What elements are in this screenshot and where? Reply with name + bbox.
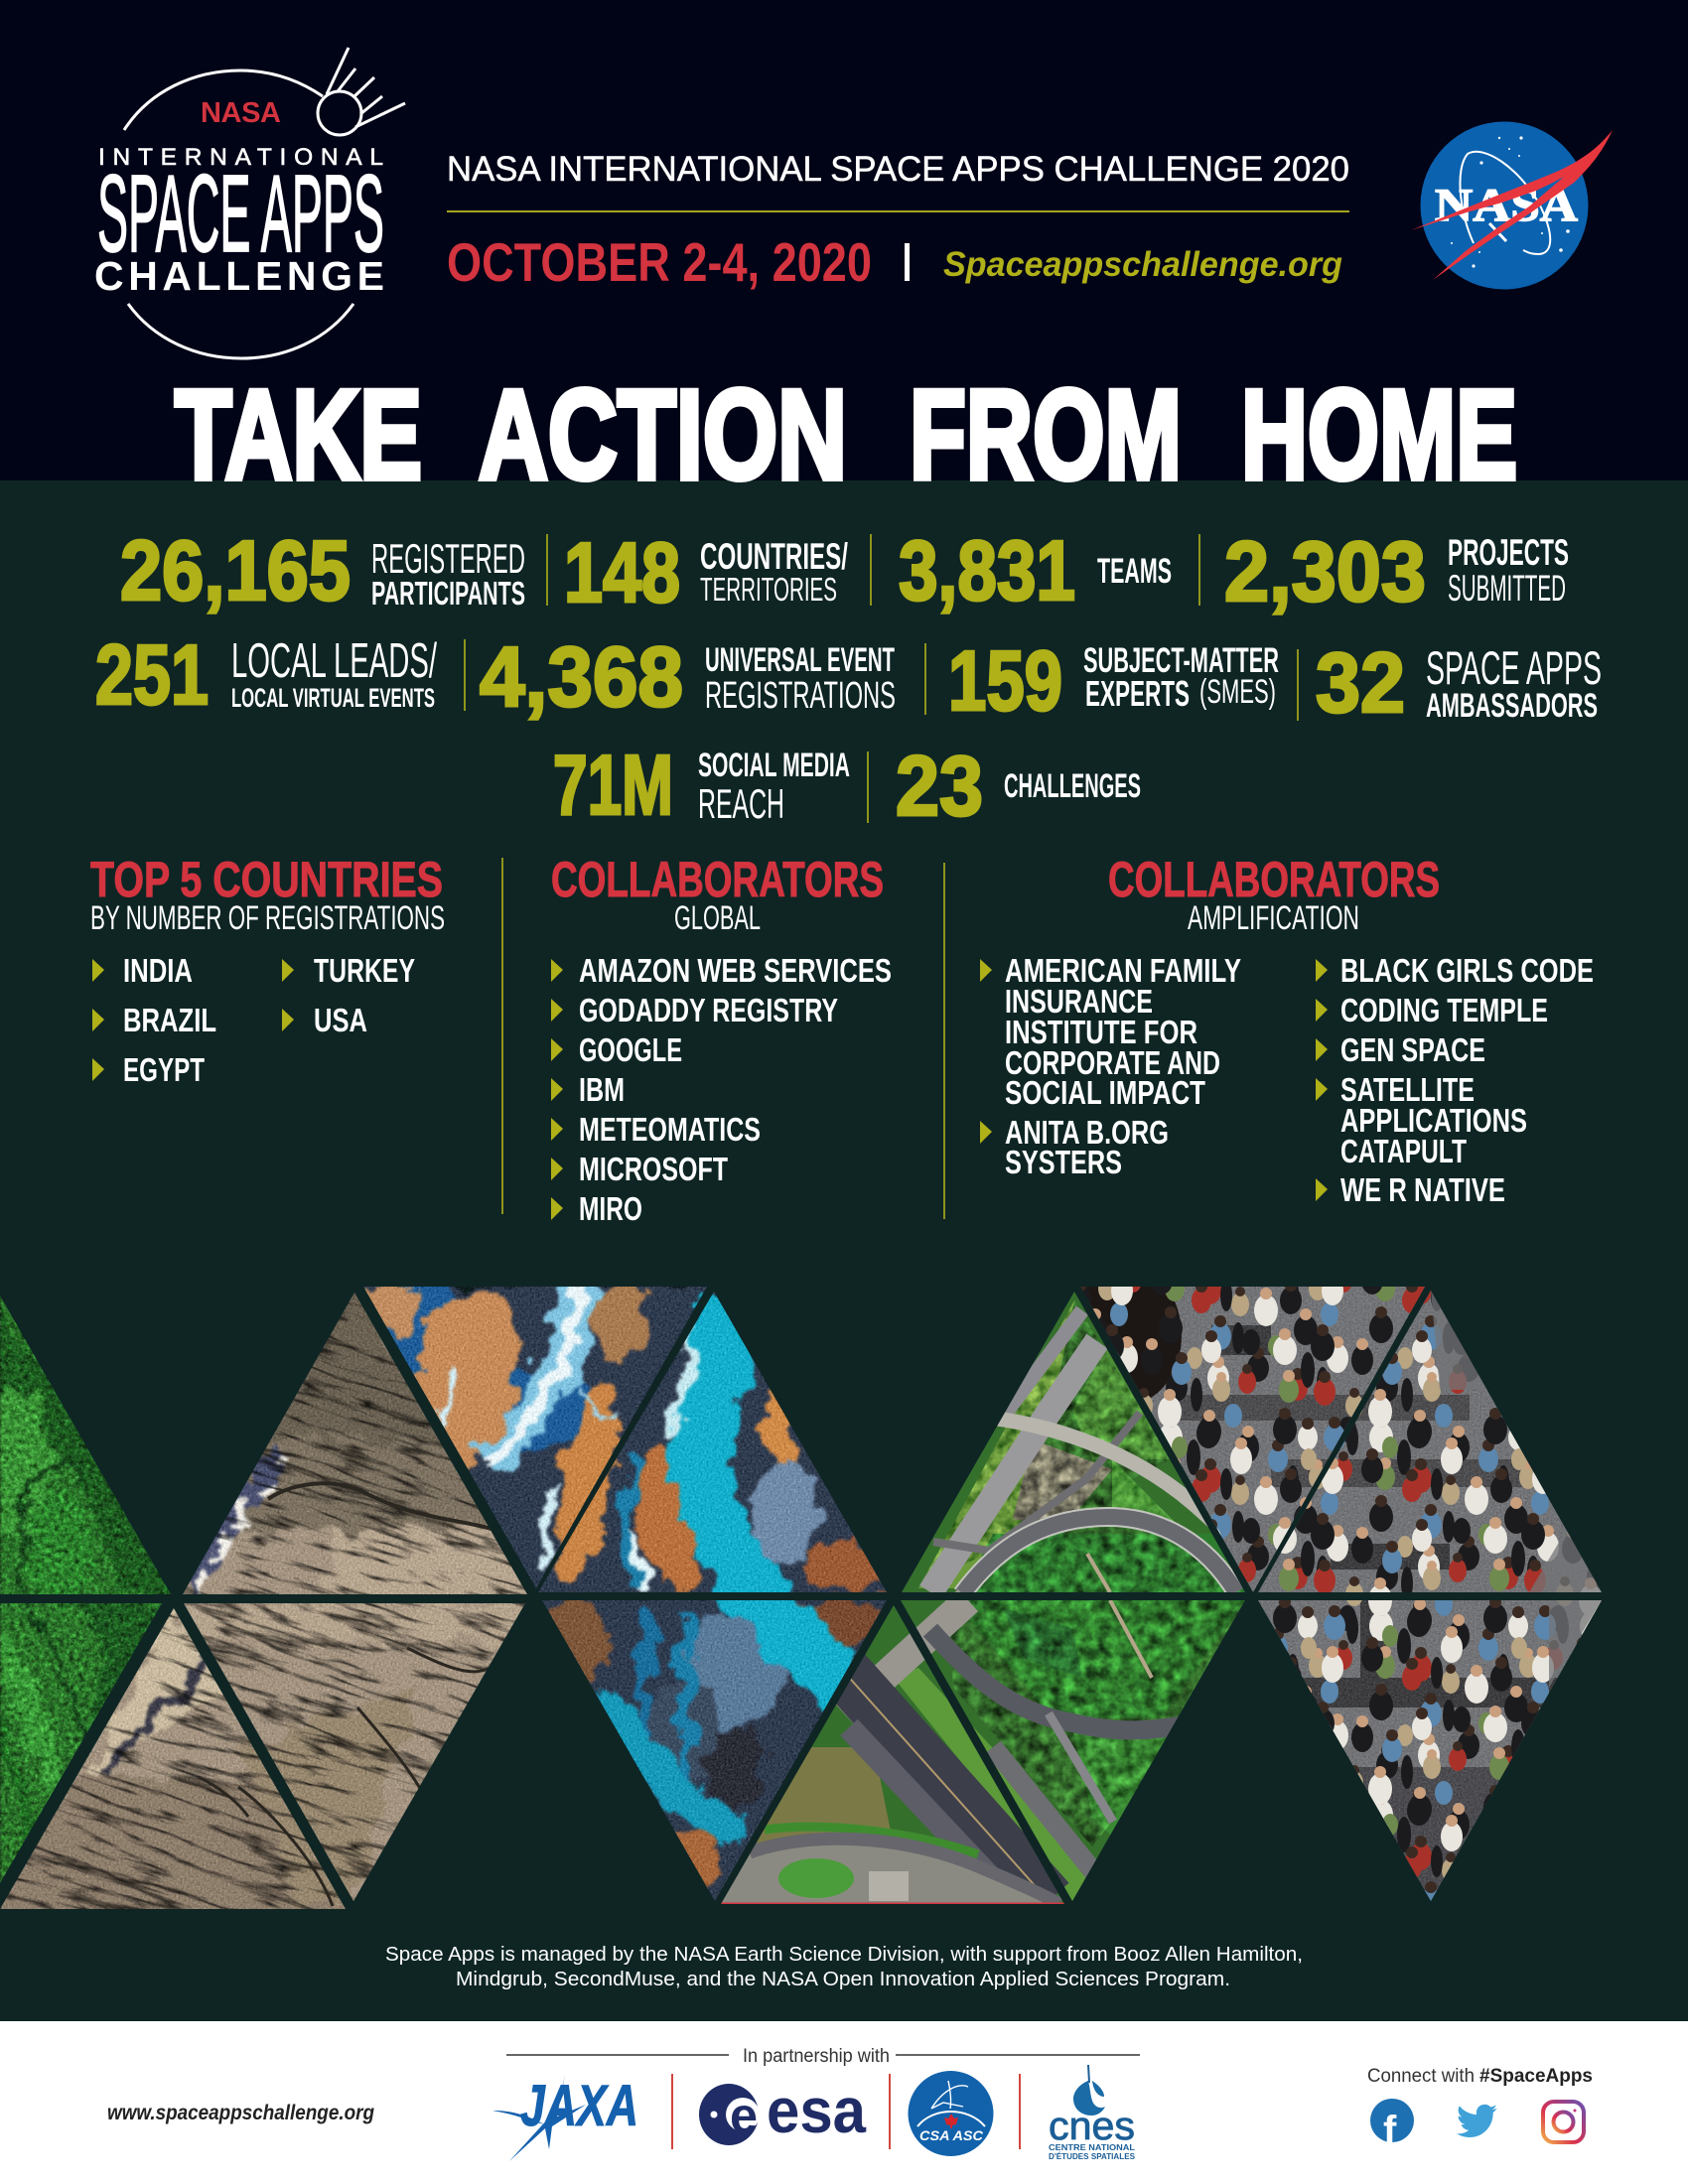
- main headline: TAKE: [175, 364, 422, 506]
- panel: top 5 countries: [90, 852, 445, 1088]
- stat: challenges: [896, 740, 1141, 834]
- logo: ESA: e: [730, 2088, 758, 2143]
- main headline: [175, 364, 1517, 506]
- panel: top 5 countries: EGYPT: [123, 1051, 205, 1088]
- panel: amplification collaborators: CODING TEMPLE: [1340, 992, 1548, 1028]
- panel: global collaborators: COLLABORATORS: [551, 852, 884, 907]
- panel: amplification collaborators: SOCIAL IMPACT: [1005, 1074, 1205, 1111]
- website link: Spaceappschallenge.org: [943, 245, 1342, 284]
- logo: CNES: D'ÉTUDES SPATIALES: [1049, 2151, 1135, 2161]
- stat: countries: TERRITORIES: [700, 571, 837, 608]
- panel: amplification collaborators: CORPORATE AND: [1005, 1044, 1220, 1081]
- stat: social media reach: SOCIAL MEDIA: [698, 747, 850, 784]
- panel: amplification collaborators: AMERICAN FAMILY: [1005, 952, 1241, 989]
- credit text: Mindgrub, SecondMuse, and the NASA Open Innovation Applied Sciences Program.: [456, 1968, 1230, 1990]
- panel: amplification collaborators: BLACK GIRLS CODE: [1340, 952, 1594, 989]
- stat: subject-matter experts: 159: [948, 634, 1062, 729]
- logo: Space Apps Challenge: NASA: [201, 97, 281, 129]
- panel: amplification collaborators: AMPLIFICATION: [1188, 899, 1359, 937]
- logo: CSA ASC: CSA ASC: [919, 2127, 984, 2143]
- panel: amplification collaborators: INSURANCE: [1005, 983, 1153, 1020]
- stat: subject-matter experts: SUBJECT-MATTER: [1083, 641, 1279, 680]
- stat: local leads: 251: [95, 628, 209, 723]
- image mosaic: rocky terrain: [0, 1293, 527, 1909]
- logo: NASA meatball: NASA: [1435, 180, 1578, 231]
- panel: amplification collaborators: COLLABORATORS: [1108, 852, 1440, 907]
- image mosaic: crowd from above: [1080, 1287, 1602, 1901]
- connect with hashtag: #SpaceApps: [1479, 2066, 1593, 2087]
- stat: social media reach: 71M: [553, 739, 673, 833]
- logo: CNES: cnes: [1049, 2105, 1135, 2148]
- panel: top 5 countries: BY NUMBER OF REGISTRATIONS: [90, 899, 445, 937]
- panel: amplification collaborators: SYSTERS: [1005, 1144, 1122, 1180]
- footer website: www.spaceappschallenge.org: [107, 2102, 374, 2124]
- stat: projects: 2,303: [1224, 525, 1426, 619]
- logo: JAXA: JAXA: [520, 2074, 638, 2138]
- stat: subject-matter experts: [948, 634, 1279, 729]
- icon: Twitter: [1457, 2105, 1497, 2137]
- stat: projects: PROJECTS: [1448, 532, 1569, 573]
- header title: NASA INTERNATIONAL SPACE APPS CHALLENGE 2020: [447, 150, 1349, 189]
- panel: amplification collaborators: INSTITUTE FOR: [1005, 1014, 1197, 1050]
- icon: Facebook: f: [1383, 2109, 1397, 2152]
- credit text: [385, 1943, 1303, 1990]
- panel: amplification collaborators: APPLICATIONS: [1340, 1102, 1527, 1139]
- stat: universal event registrations: UNIVERSAL EVENT: [705, 641, 895, 679]
- stat: subject-matter experts: EXPERTS: [1085, 673, 1190, 714]
- main headline: ACTION: [479, 364, 847, 506]
- connect with hashtag: [1367, 2066, 1593, 2087]
- logo: Space Apps Challenge: CHALLENGE: [94, 253, 384, 299]
- icon: Instagram: [1543, 2102, 1584, 2142]
- partnership heading: In partnership with: [743, 2046, 890, 2067]
- logo: JAXA: [492, 2074, 638, 2161]
- stat: countries: 148: [564, 526, 680, 620]
- panel: global collaborators: [551, 852, 892, 1227]
- stat: universal event registrations: 4,368: [480, 630, 683, 725]
- stat: social media reach: REACH: [698, 780, 784, 827]
- header background: [0, 0, 1688, 480]
- panel: top 5 countries: USA: [314, 1002, 367, 1038]
- stat: registered participants: 26,165: [120, 524, 351, 618]
- header divider: [447, 210, 1349, 212]
- panel: amplification collaborators: WE R NATIVE: [1340, 1171, 1505, 1208]
- panel: global collaborators: METEOMATICS: [579, 1111, 761, 1148]
- main headline: FROM: [910, 364, 1182, 506]
- logo: Space Apps Challenge: INTERNATIONAL: [98, 144, 383, 171]
- stat: ambassadors: AMBASSADORS: [1426, 687, 1598, 725]
- logo: CSA ASC: [908, 2071, 993, 2156]
- panel: amplification collaborators: GEN SPACE: [1340, 1031, 1485, 1068]
- logo: ESA: esa: [767, 2075, 866, 2146]
- stat: ambassadors: [1316, 636, 1602, 731]
- event date: OCTOBER 2-4, 2020: [447, 231, 872, 293]
- icon: Facebook: [1370, 2099, 1414, 2152]
- image mosaic: braided river: [363, 1287, 887, 1901]
- panel: top 5 countries: BRAZIL: [123, 1002, 216, 1038]
- connect with hashtag: Connect with: [1367, 2066, 1475, 2087]
- stat: local leads: LOCAL VIRTUAL EVENTS: [231, 683, 435, 713]
- panel: amplification collaborators: SATELLITE: [1340, 1071, 1475, 1108]
- stat: projects: SUBMITTED: [1448, 568, 1566, 609]
- image mosaic: green terraces: [0, 1296, 171, 1883]
- panel: amplification collaborators: ANITA B.ORG: [1005, 1114, 1169, 1151]
- panel: top 5 countries: TOP 5 COUNTRIES: [90, 852, 443, 907]
- stat: countries: [564, 526, 848, 620]
- main section background: [0, 480, 1688, 2021]
- logo: CNES: [1049, 2065, 1135, 2161]
- stat: registered participants: [120, 524, 525, 618]
- image mosaic: highway interchange: [715, 1281, 1251, 1916]
- panel: global collaborators: AMAZON WEB SERVICES: [579, 952, 892, 989]
- logo: Space Apps Challenge: [94, 48, 405, 358]
- date separator bar: [905, 243, 910, 281]
- stat: countries: COUNTRIES/: [700, 536, 848, 577]
- text: SPACE APPS: [97, 153, 384, 275]
- stat: projects: [1224, 525, 1569, 619]
- panel: global collaborators: MICROSOFT: [579, 1151, 728, 1187]
- stat: local leads: LOCAL LEADS/: [231, 634, 437, 688]
- stat: challenges: 23: [896, 740, 983, 834]
- stat: subject-matter experts: (SMES): [1199, 673, 1276, 711]
- panel: global collaborators: GLOBAL: [674, 899, 761, 937]
- logo: CNES: CENTRE NATIONAL: [1049, 2142, 1135, 2152]
- stat: teams: TEAMS: [1097, 552, 1172, 591]
- panel: top 5 countries: TURKEY: [314, 952, 415, 989]
- logo: NASA meatball: [1411, 121, 1613, 290]
- panel: amplification collaborators: [980, 852, 1594, 1208]
- stat: universal event registrations: REGISTRATIONS: [705, 675, 896, 717]
- stat: registered participants: PARTICIPANTS: [371, 575, 525, 612]
- stat: local leads: [95, 628, 437, 723]
- stat: ambassadors: 32: [1316, 636, 1405, 731]
- panel: amplification collaborators: CATAPULT: [1340, 1133, 1467, 1169]
- credit text: Space Apps is managed by the NASA Earth Science Division, with support from Booz Allen Hamilton,: [385, 1943, 1303, 1966]
- stat: registered participants: REGISTERED: [371, 535, 525, 582]
- panel: global collaborators: MIRO: [579, 1190, 642, 1227]
- panel: global collaborators: GOOGLE: [579, 1031, 682, 1068]
- stat: teams: 3,831: [899, 524, 1075, 618]
- stat: challenges: CHALLENGES: [1004, 767, 1141, 805]
- main headline: HOME: [1241, 364, 1517, 506]
- footer background: [0, 2021, 1688, 2184]
- panel: top 5 countries: INDIA: [123, 952, 193, 989]
- logo: ESA: [699, 2075, 866, 2146]
- stat: universal event registrations: [480, 630, 896, 725]
- panel: global collaborators: IBM: [579, 1071, 625, 1108]
- stat: social media reach: [553, 739, 850, 833]
- panel: global collaborators: GODADDY REGISTRY: [579, 992, 838, 1028]
